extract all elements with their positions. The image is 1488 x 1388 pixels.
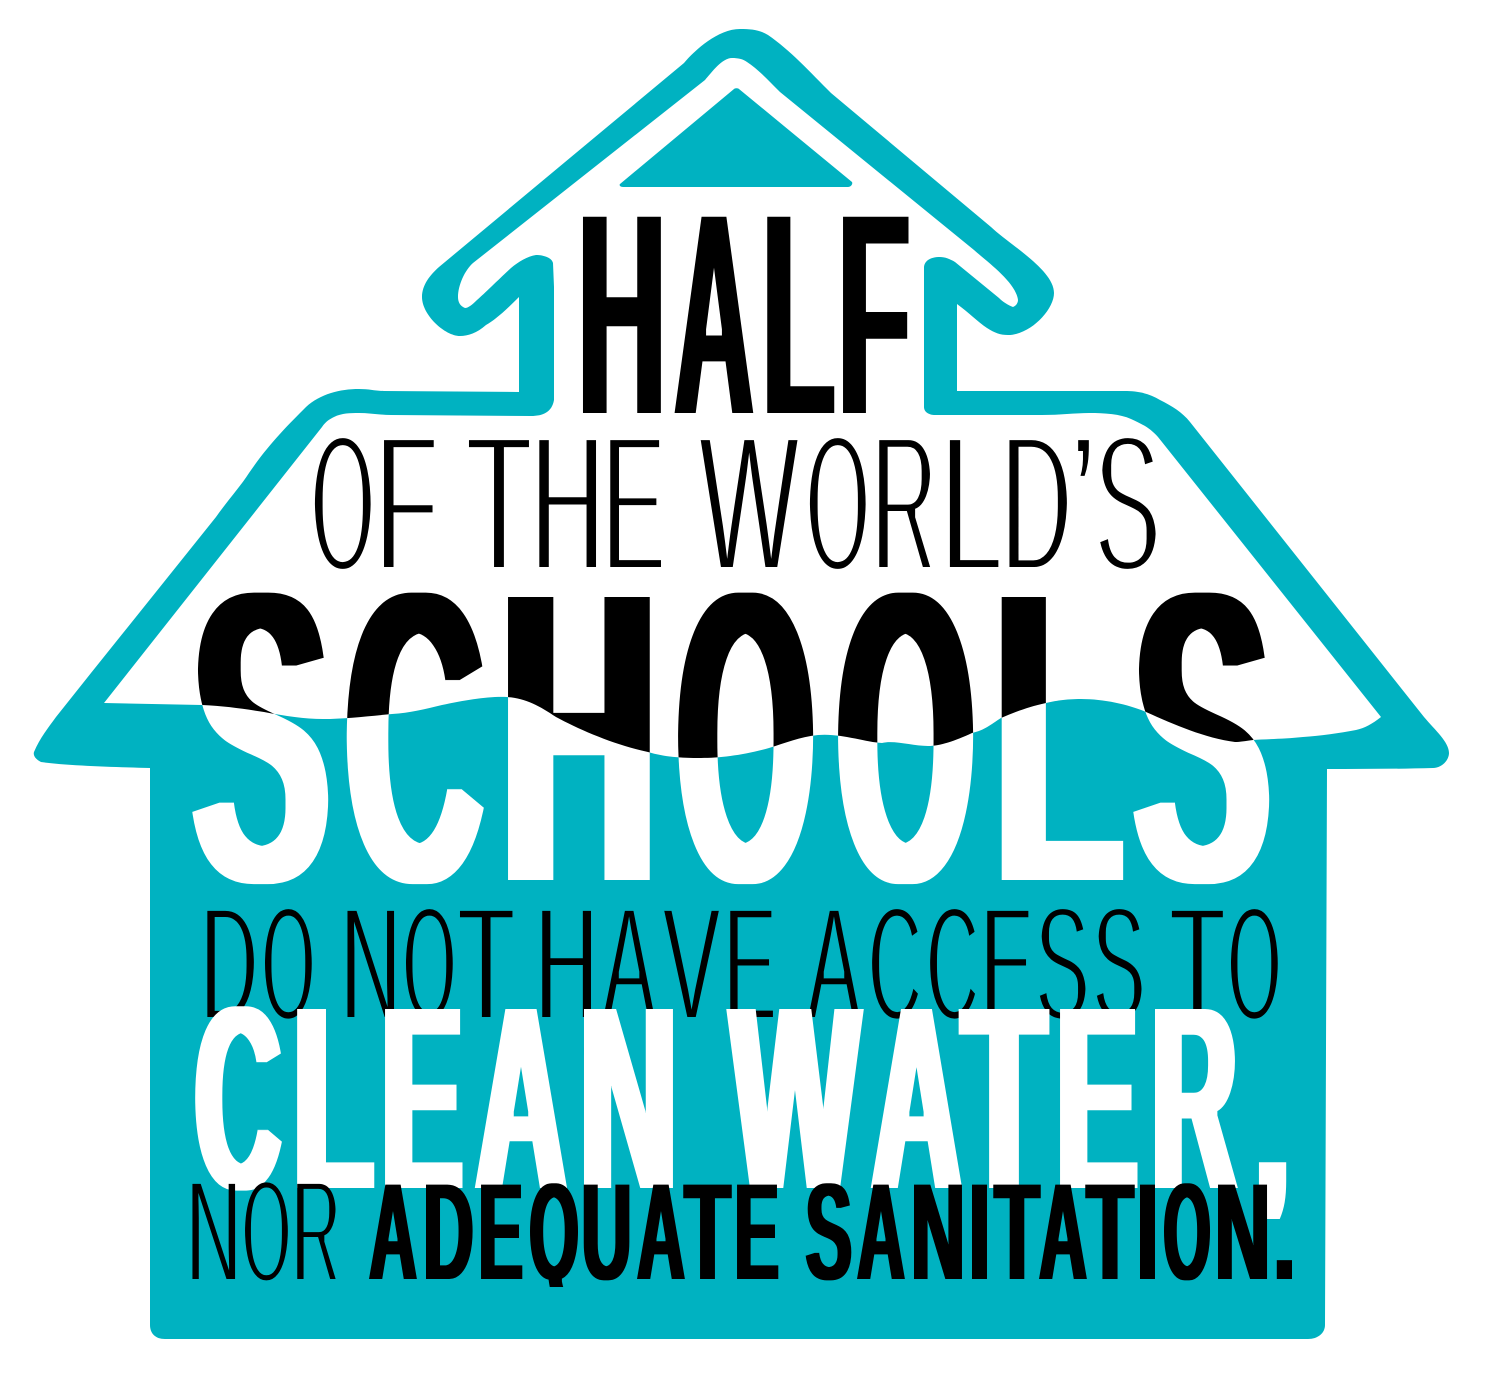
heading: clean water: A bbox=[872, 950, 961, 1247]
heading: clean water: E bbox=[1057, 950, 1137, 1247]
text: do not have access to: O bbox=[262, 872, 315, 1055]
heading: adequate sanitation: A bbox=[857, 1153, 905, 1310]
text: do not have access to: S bbox=[1035, 872, 1089, 1055]
heading: adequate sanitation: A bbox=[1039, 1153, 1087, 1310]
heading: adequate sanitation: D bbox=[423, 1153, 474, 1310]
heading: adequate sanitation: E bbox=[735, 1153, 779, 1310]
heading: clean water: W bbox=[731, 950, 861, 1247]
heading: adequate sanitation: E bbox=[479, 1153, 523, 1310]
text: nor: O bbox=[242, 1150, 291, 1314]
text: do not have access to: H bbox=[535, 872, 598, 1055]
text: do not have access to: O bbox=[403, 872, 456, 1055]
heading: adequate sanitation: I bbox=[969, 1153, 990, 1310]
heading: adequate sanitation: A bbox=[369, 1153, 417, 1310]
heading: schools white part: H bbox=[500, 501, 657, 974]
text: of the world's: S bbox=[1095, 394, 1160, 613]
text: do not have access to: N bbox=[341, 872, 401, 1055]
text: of the world's: ’ bbox=[1071, 394, 1096, 613]
heading: schools black part: O bbox=[678, 501, 814, 974]
heading: adequate sanitation: I bbox=[1137, 1153, 1158, 1310]
heading: schools black part: L bbox=[995, 501, 1123, 974]
text: S bbox=[1133, 501, 1270, 974]
text: do not have access to: A bbox=[602, 872, 656, 1055]
heading: clean water: A bbox=[476, 950, 566, 1247]
text: of the world's: F bbox=[376, 394, 438, 613]
text: of the world's: H bbox=[531, 394, 604, 613]
heading: adequate sanitation: T bbox=[994, 1153, 1040, 1310]
text: of the world's: W bbox=[699, 394, 799, 613]
text: of the world's: L bbox=[941, 394, 1002, 613]
heading: schools white part: O bbox=[678, 501, 814, 974]
text: of the world's: O bbox=[311, 394, 375, 613]
text: do not have access to: V bbox=[663, 872, 720, 1055]
heading: adequate sanitation: Q bbox=[529, 1153, 579, 1310]
text: of the world's: E bbox=[603, 394, 665, 613]
heading: schools black part: O bbox=[838, 501, 974, 974]
roof interior bbox=[104, 58, 1381, 758]
heading: adequate sanitation: N bbox=[911, 1153, 965, 1310]
heading: clean water: L bbox=[293, 950, 373, 1247]
text: do not have access to: T bbox=[1170, 872, 1225, 1055]
heading: adequate sanitation: . bbox=[1273, 1153, 1296, 1310]
heading: adequate sanitation: S bbox=[805, 1153, 852, 1310]
heading: clean water: , bbox=[1255, 1010, 1289, 1233]
heading: schools black part bbox=[198, 592, 1265, 758]
text: of the world's: O bbox=[806, 394, 870, 613]
heading: adequate sanitation: A bbox=[637, 1153, 685, 1310]
heading: adequate sanitation bbox=[369, 1183, 1292, 1287]
text: do not have access to: E bbox=[981, 872, 1033, 1055]
heading: adequate sanitation: U bbox=[582, 1153, 632, 1310]
text: S bbox=[1133, 501, 1270, 974]
text: do not have access to: D bbox=[201, 872, 258, 1055]
heading: schools black part: H bbox=[500, 501, 657, 974]
text: R bbox=[292, 1150, 341, 1314]
heading: schools white part: C bbox=[346, 501, 483, 974]
text: of the world's: T bbox=[467, 394, 531, 613]
heading: adequate sanitation: T bbox=[1086, 1153, 1134, 1310]
text: O bbox=[1228, 872, 1281, 1055]
heading: clean water: T bbox=[962, 950, 1046, 1247]
heading: schools black part: C bbox=[346, 501, 483, 974]
text: do not have access to: E bbox=[724, 872, 776, 1055]
heading: adequate sanitation: N bbox=[1215, 1153, 1270, 1310]
heading: HALF: L bbox=[762, 151, 835, 479]
heading: clean water: R bbox=[1152, 950, 1236, 1247]
heading: adequate sanitation: O bbox=[1164, 1153, 1211, 1310]
text: do not have access to: C bbox=[868, 872, 922, 1055]
text: do not have access to: T bbox=[458, 872, 513, 1055]
heading: HALF: A bbox=[674, 151, 754, 479]
heading: schools white part: S bbox=[192, 501, 329, 974]
text: do not have access to: S bbox=[1092, 872, 1145, 1055]
heading: schools white part: O bbox=[838, 501, 974, 974]
text: of the world's: R bbox=[872, 394, 937, 613]
text: do not have access to: A bbox=[807, 872, 861, 1055]
roof triangle bbox=[620, 88, 852, 187]
text: nor: N bbox=[186, 1150, 241, 1314]
heading: clean water: E bbox=[382, 950, 462, 1247]
heading: clean water: N bbox=[580, 950, 677, 1247]
heading: schools white part: L bbox=[995, 501, 1123, 974]
text: do not have access to: C bbox=[926, 872, 979, 1055]
text: of the world's: D bbox=[1002, 394, 1072, 613]
heading: schools black part: S bbox=[192, 501, 329, 974]
text: F bbox=[838, 151, 910, 479]
heading: HALF: H bbox=[578, 151, 666, 479]
heading: adequate sanitation: T bbox=[684, 1153, 731, 1310]
heading: clean water: C bbox=[195, 950, 281, 1247]
